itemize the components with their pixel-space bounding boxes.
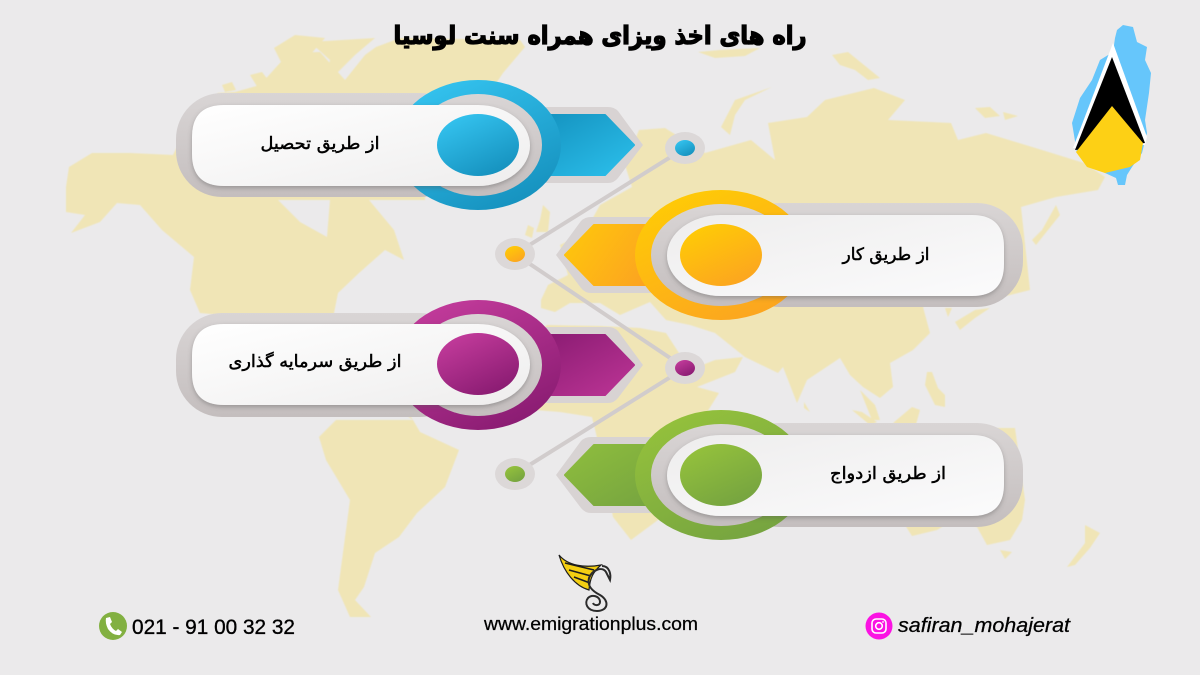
map: europe and asia [541,88,1105,403]
map: uk and iceland [500,188,550,238]
map: novaya zemlya [721,87,772,135]
map: south east asia islands [852,372,945,428]
panel: work route [556,190,1023,320]
contact: instagram [866,612,1072,640]
map: north america [66,52,430,420]
title: راه های اخذ ویزای همراه سنت لوسیا [394,21,806,51]
icon: instagram [866,612,892,640]
phone number: 021 - 91 00 32 32 [132,616,295,639]
map: south america [319,420,459,617]
map: africa [520,325,743,540]
contact: phone [99,612,295,640]
node: blue [665,132,705,164]
instagram handle: safiran_mohajerat [898,615,1072,637]
panel: education route [176,80,643,210]
icon: winged logo [559,555,610,611]
label: education: از طریق تحصیل [260,134,380,154]
icon: saint lucia flag map [1072,25,1151,185]
map: japan and sakhalin [945,308,990,330]
label: marriage: از طریق ازدواج [830,464,946,484]
map: australia [905,428,1025,545]
panel: investment route [176,300,643,430]
icon: phone [99,612,127,640]
map: arctic islands [222,35,375,92]
node: green [495,458,535,490]
map: kamchatka [1032,205,1060,245]
map: greenland [345,38,525,100]
connector lines [515,148,685,474]
world map [66,35,1105,617]
node: purple [665,352,705,384]
label: work: از طریق کار [842,245,930,265]
label: investment: از طریق سرمایه گذاری [228,351,402,372]
map: svalbard and arctic russia [698,48,1018,120]
map: new zealand [1067,525,1100,567]
map: tasmania [1000,550,1012,559]
map: sri lanka [804,402,810,412]
website: www.emigrationplus.com [483,614,698,634]
node: orange [495,238,535,270]
panel: marriage route [556,410,1023,540]
